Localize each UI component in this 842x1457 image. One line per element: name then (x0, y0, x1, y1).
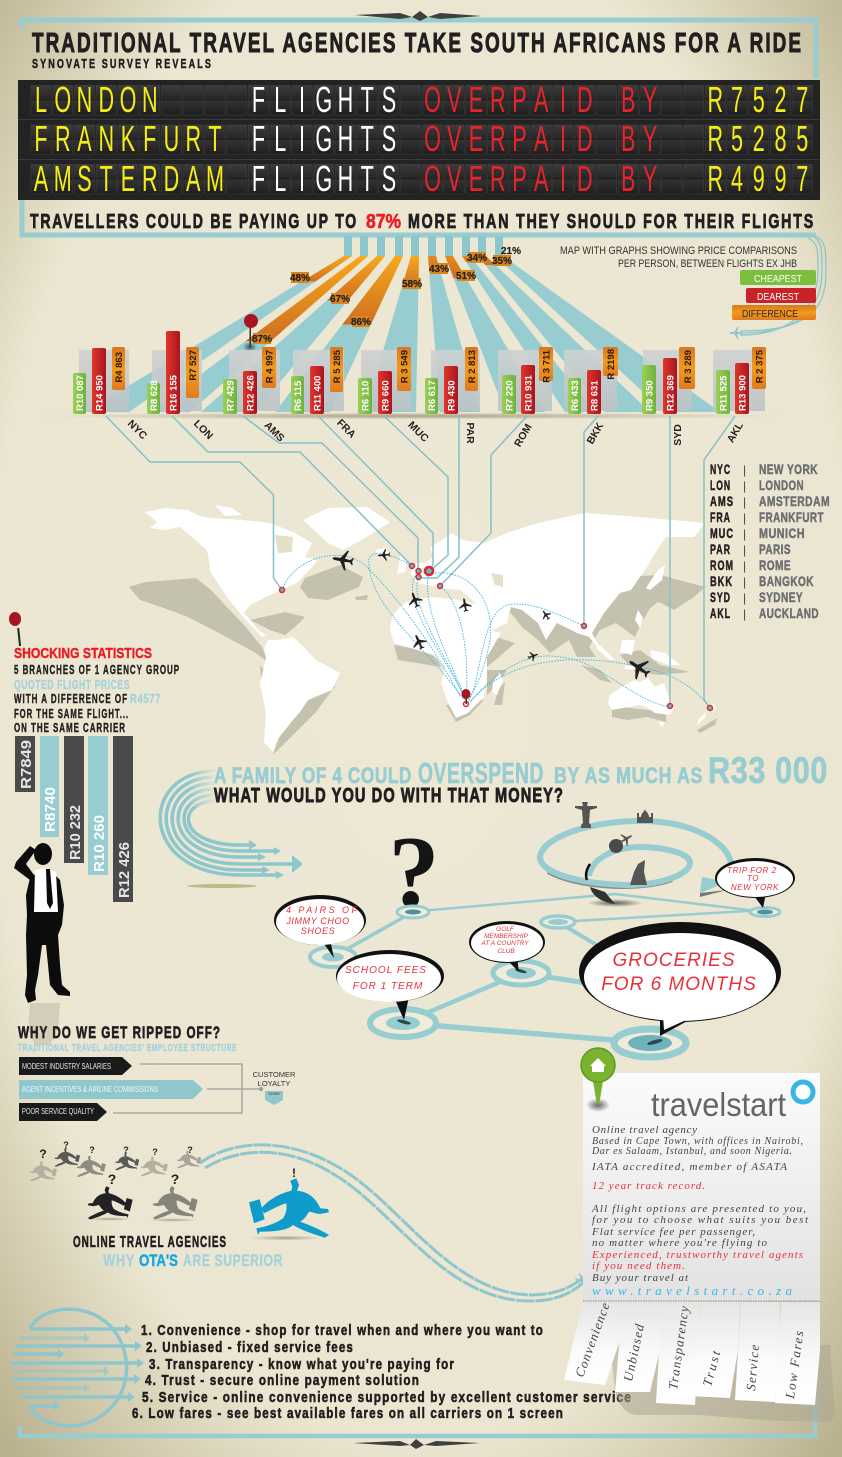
spiral of destinations (540, 802, 732, 907)
city key: | (743, 479, 746, 493)
OTA subheading: WHY (103, 1251, 135, 1270)
chart: LON (147, 331, 215, 442)
shocking statistics text: ON THE SAME CARRIER (14, 721, 126, 735)
board row: Frankfurt: FLIGHTS (252, 119, 396, 159)
subtitle: SYNOVATE SURVEY REVEALS (32, 56, 213, 71)
card text: www.travelstart.co.za (592, 1283, 792, 1298)
employee structure arrows: POOR SERVICE QUALITY (22, 1107, 94, 1116)
benefits list: 4. Trust - secure online payment solution (145, 1372, 420, 1389)
chart: MUC: MUC (405, 419, 431, 445)
card text: Experienced, trustworthy travel agents (591, 1249, 803, 1261)
chart: AMS (223, 347, 287, 444)
chart: FRA: R11 400 (312, 376, 324, 411)
chart: AKL: R 2 375 (754, 349, 766, 383)
city key: MUNICH (759, 525, 805, 541)
chart: LON: R16 155 (168, 374, 180, 411)
chart: SYD: R9 350 (644, 380, 656, 411)
shocking statistics text: WITH A DIFFERENCE OF (14, 692, 128, 706)
city key: SYDNEY (759, 589, 803, 605)
leader lines (106, 416, 735, 708)
map caption: PER PERSON, BETWEEN FLIGHTS EX JHB (618, 258, 797, 270)
chart: NYC: R4 863 (114, 352, 125, 383)
lower header frame (22, 200, 816, 235)
city key: LON (710, 477, 731, 493)
chart: ROM: R 3 711 (542, 349, 552, 383)
bubble: trip to New York: TO (747, 874, 759, 883)
OTA subheading (103, 1251, 283, 1270)
chart: MUC: R9 660 (380, 380, 392, 411)
logo: travelstart (651, 1086, 786, 1123)
benefits list: 3. Transparency - know what you're paying for (149, 1356, 455, 1373)
grey runners: ? (187, 1145, 193, 1155)
city key: BKK (710, 573, 733, 589)
bubble: Jimmy Choo: SHOES (301, 926, 335, 936)
shocking statistics text: SHOCKING STATISTICS (14, 645, 152, 662)
chart: FRA: FRA (334, 417, 358, 441)
chart: BKK (564, 347, 618, 446)
bottom ornament (353, 1439, 480, 1449)
city key: PAR (710, 541, 731, 557)
inland seas (275, 535, 503, 587)
bubble: Jimmy Choo: 4 PAIRS OF (286, 905, 358, 915)
board row: London (35, 80, 808, 120)
card text: All flight options are presented to you, (591, 1203, 806, 1215)
chart: AKL: R13 900 (738, 375, 748, 411)
chart: BKK: BKK (585, 420, 606, 446)
chart: AMS: AMS (262, 419, 287, 444)
chart: MUC: R6 110 (360, 381, 372, 411)
city key: PARIS (759, 541, 791, 557)
grey runner (149, 1171, 198, 1222)
chart: BKK: R6 433 (570, 380, 581, 411)
man silhouette (14, 843, 70, 1045)
connectors (113, 1064, 262, 1113)
departure board (18, 80, 820, 200)
customer loyalty: DOWN (268, 1092, 280, 1096)
tab: Transparency: Transparency (665, 1305, 692, 1390)
board row: London: R7527 (707, 80, 808, 120)
grey runners: ? (63, 1140, 69, 1150)
chart: ROM (498, 347, 553, 449)
price bars (15, 736, 133, 902)
board row: London: BY (621, 80, 657, 120)
top frame (22, 20, 816, 78)
employee structure arrows (19, 1057, 203, 1121)
family subheading: WHAT WOULD YOU DO WITH THAT MONEY? (214, 785, 564, 807)
city key: AUCKLAND (759, 605, 819, 621)
flight routes (282, 554, 710, 708)
travelstart card (583, 1073, 820, 1301)
card text: for you to choose what suits you best (592, 1214, 809, 1226)
chart: BKK: R8 631 (590, 380, 600, 411)
customer loyalty (253, 1070, 296, 1105)
pin: shocking statistics (9, 612, 21, 646)
blue runner (249, 1166, 329, 1240)
chart: FRA (291, 347, 358, 441)
card text (591, 1124, 809, 1298)
percentage labels: 43% (429, 264, 449, 275)
card text: Dar es Salaam, Istanbul, and soon Nigeria. (591, 1146, 792, 1157)
bubble: school fees: SCHOOL FEES (345, 965, 427, 976)
bubble: golf (469, 921, 545, 972)
bubble: groceries: FOR 6 MONTHS (601, 974, 757, 995)
city key: SYD (710, 589, 731, 605)
bubble: golf: MEMBERSHIP (484, 933, 529, 940)
arrow fade overlay (188, 765, 218, 807)
card text: if you need them. (592, 1260, 685, 1272)
OTA subheading: ARE SUPERIOR (183, 1251, 283, 1270)
city key: AKL (710, 605, 731, 621)
planes (330, 548, 655, 683)
arrow heads (187, 840, 303, 888)
chart: FRA: R6 115 (293, 380, 304, 411)
family heading (214, 750, 828, 791)
employee structure arrows: AGENT INCENTIVES & AIRLINE COMMISSIONS (22, 1085, 158, 1094)
map caption: MAP WITH GRAPHS SHOWING PRICE COMPARISONS (560, 245, 797, 257)
chart: AKL: AKL (725, 420, 746, 445)
chart: NYC: R14 950 (94, 375, 106, 411)
price bars: R8740 (42, 787, 59, 832)
card text: no matter where you're flying to (592, 1237, 768, 1249)
city key: LONDON (759, 477, 804, 493)
top ornament (355, 11, 482, 21)
world map shadow (129, 565, 717, 755)
headline: 87%: TRAVELLERS COULD BE PAYING UP TO (30, 211, 358, 233)
board row: Frankfurt: OVERPAID (424, 119, 593, 159)
percentage labels: 87% (252, 334, 272, 345)
chart: BKK: R 2198 (606, 349, 617, 380)
tab: Trust (689, 1302, 740, 1398)
bubble: trip to New York (715, 858, 795, 908)
city key: NEW YORK (759, 461, 818, 477)
chart: ROM: ROM (512, 422, 535, 449)
chart: NYC: NYC (125, 418, 149, 442)
chart: PAR: R9 430 (446, 380, 458, 411)
chart: SYD: SYD (672, 424, 684, 446)
chart: AKL (713, 347, 766, 445)
board row: London: LONDON (35, 80, 158, 120)
price bars: R10 260 (91, 815, 108, 872)
board row: London: FLIGHTS (252, 80, 396, 120)
grey runners: ? (89, 1145, 95, 1155)
city key: | (743, 607, 746, 621)
bubble: golf: GOLF (496, 926, 515, 933)
board row: Frankfurt (34, 119, 808, 159)
question mark: ? (388, 816, 440, 929)
chart: FRA: R 5 285 (332, 349, 343, 383)
logo ring (793, 1082, 813, 1102)
chart: AKL: R11 525 (718, 375, 730, 411)
chart: LON: LON (191, 418, 215, 442)
city key: | (743, 463, 746, 477)
tab: Convenience (564, 1300, 622, 1385)
shocking statistics text: 5 BRANCHES OF 1 AGENCY GROUP (14, 663, 180, 677)
world map (145, 505, 716, 752)
city key: | (743, 543, 746, 557)
family heading: BY AS MUCH AS (554, 763, 703, 788)
price bars: R10 232 (67, 805, 84, 860)
chart: LON: R8 628 (149, 380, 160, 411)
icon: Burj tower (630, 860, 647, 885)
bottom frame (20, 1395, 815, 1436)
airport markers (280, 564, 712, 710)
family heading: A FAMILY OF 4 COULD (214, 763, 412, 788)
OTA subheading: OTA'S (139, 1251, 178, 1270)
city key: FRA (710, 509, 731, 525)
card text: 12 year track record. (592, 1180, 705, 1192)
board row: Amsterdam (34, 159, 808, 199)
card text: Online travel agency (592, 1124, 697, 1136)
chart: PAR: R 2 813 (467, 350, 478, 383)
icon: Taj Mahal (637, 809, 653, 823)
percentage labels: 48% (290, 273, 310, 284)
bubble: school fees (336, 950, 444, 1020)
chart: MUC: R 3 549 (400, 350, 410, 383)
card text: Buy your travel at (592, 1272, 689, 1284)
tab: Low Fares: Low Fares (782, 1330, 806, 1400)
OTA heading: ONLINE TRAVEL AGENCIES (73, 1234, 227, 1251)
ground shadow under bars (37, 412, 787, 420)
card text: Based in Cape Town, with offices in Nairobi, (592, 1136, 803, 1147)
city key: | (743, 575, 746, 589)
card text: IATA accredited, member of ASATA (591, 1161, 787, 1173)
percentage labels: 34% (467, 253, 487, 264)
city key (710, 461, 830, 621)
arrow globe (11, 1309, 144, 1426)
chart: ROM: R10 931 (524, 374, 534, 411)
percentage labels: 51% (456, 271, 476, 282)
price bars: R7849 (18, 740, 35, 789)
percentage labels: 21% (501, 246, 521, 257)
city key: ROME (759, 557, 791, 573)
customer loyalty: LOYALTY (258, 1079, 290, 1088)
tab: Service: Service (743, 1344, 762, 1391)
bubble: groceries (579, 922, 781, 1036)
legend: DIFFERENCE (742, 308, 798, 320)
tear-off tabs (564, 1300, 820, 1405)
city key: | (743, 527, 746, 541)
tab: Convenience: Convenience (572, 1300, 613, 1379)
chart: NYC (73, 347, 149, 442)
map caption (560, 245, 797, 270)
tab: Trust: Trust (699, 1349, 723, 1388)
network of lines (333, 894, 765, 1043)
chart: PAR: PAR (464, 422, 476, 444)
swoosh with plane (729, 236, 826, 339)
benefits list: 6. Low fares - see best available fares on all carriers on 1 screen (132, 1405, 564, 1422)
tab: Low Fares (775, 1302, 820, 1405)
city key: MUC (710, 525, 734, 541)
shocking statistics text: QUOTED FLIGHT PRICES (14, 678, 130, 692)
family heading: OVERSPEND (418, 758, 544, 790)
legend (732, 270, 816, 320)
fan of price bands (85, 236, 720, 412)
city key: NYC (710, 461, 731, 477)
Johannesburg pin (462, 689, 470, 704)
shocking statistics text (14, 645, 180, 735)
shocking statistics text: R4577 (130, 692, 161, 706)
swoosh to travelstart (200, 1145, 583, 1301)
chart: LON: R7 527 (188, 350, 199, 381)
bubble: trip to New York: NEW YORK (731, 883, 779, 892)
chart: SYD: R 3 289 (683, 350, 694, 383)
tab: Unbiased: Unbiased (620, 1322, 647, 1383)
city key: | (743, 591, 746, 605)
headline: 87% (30, 211, 815, 233)
black runner (88, 1171, 133, 1221)
why section subheading: TRADITIONAL TRAVEL AGENCIES' EMPLOYEE STRUCTURE (18, 1042, 237, 1054)
icon: Christ statue (575, 802, 597, 828)
black runner: ? (108, 1171, 116, 1187)
board row: Amsterdam: OVERPAID (424, 159, 593, 199)
legend: CHEAPEST (754, 273, 802, 285)
benefits list: 2. Unbiased - fixed service fees (146, 1339, 354, 1356)
tab: Service (735, 1302, 780, 1402)
headline: 87%: 87% (366, 211, 401, 233)
bubble: Jimmy Choo: JIMMY CHOO (285, 916, 350, 926)
chart: AMS: R 4 997 (264, 350, 276, 383)
percentage labels: 58% (402, 279, 422, 290)
green home pin (581, 1048, 615, 1112)
city key: | (743, 495, 746, 509)
board row: Frankfurt: FRANKFURT (34, 119, 222, 159)
benefits list: 5. Service - online convenience supported by excellent customer service (142, 1389, 632, 1406)
blue runner: ! (292, 1166, 296, 1180)
chart: ROM: R7 220 (504, 380, 516, 411)
chart: MUC (358, 347, 431, 445)
bubble: trip to New York: TRIP FOR 2 (727, 866, 777, 875)
why section heading: WHY DO WE GET RIPPED OFF? (18, 1023, 221, 1042)
grey runners: ? (123, 1145, 129, 1155)
employee structure arrows: MODEST INDUSTRY SALARIES (22, 1062, 111, 1071)
curved arrows (160, 771, 296, 875)
grey runners: ? (152, 1147, 158, 1157)
chart: AMS: R7 429 (226, 380, 236, 411)
plane at swoosh end (574, 1272, 590, 1286)
city key: AMS (710, 493, 734, 509)
tab: Transparency (656, 1302, 700, 1405)
grey runner: ? (171, 1171, 179, 1187)
bubble: groceries: GROCERIES (612, 950, 736, 971)
bubble: golf: AT A COUNTRY (480, 940, 529, 947)
bubble: golf: CLUB (497, 948, 515, 955)
board row: Amsterdam: AMSTERDAM (34, 159, 224, 199)
grey runners (30, 1140, 201, 1181)
customer loyalty: CUSTOMER (253, 1070, 296, 1079)
benefits list (132, 1322, 632, 1422)
percentage labels (252, 246, 521, 345)
chart: AMS: R12 426 (246, 375, 256, 411)
board row: Frankfurt: R5285 (707, 119, 808, 159)
city key: BANGKOK (759, 573, 814, 589)
percentage labels: 67% (330, 294, 350, 305)
board row: London: OVERPAID (424, 80, 593, 120)
city key: | (743, 559, 746, 573)
board row: Amsterdam: FLIGHTS (252, 159, 396, 199)
chart: PAR (425, 347, 480, 444)
chart: SYD: R12 369 (666, 375, 676, 411)
chart: NYC: R10 087 (75, 375, 86, 411)
tab shadows (610, 1345, 835, 1423)
percentage labels: 86% (351, 317, 371, 328)
percentage labels: 35% (492, 256, 512, 267)
city key: ROM (710, 557, 734, 573)
benefits list: 1. Convenience - shop for travel when and where you want to (141, 1322, 544, 1339)
legend: DEAREST (757, 291, 799, 303)
board row: Amsterdam: R4997 (707, 159, 808, 199)
icon: globe and plane (609, 830, 635, 853)
grey runners: ? (39, 1147, 47, 1161)
pin on chart (243, 314, 258, 352)
bubble: Jimmy Choo (274, 895, 366, 958)
board row: Frankfurt: BY (621, 119, 657, 159)
shocking statistics text: FOR THE SAME FLIGHT... (14, 707, 129, 721)
chart: SYD (642, 347, 695, 446)
bubble: school fees: FOR 1 TERM (353, 981, 423, 992)
chart: PAR: R6 617 (427, 380, 438, 411)
price bars: R12 426 (116, 842, 133, 898)
city key: | (743, 511, 746, 525)
card text: Flat service fee per passenger, (591, 1226, 755, 1238)
tab: Unbiased (615, 1302, 661, 1392)
network nodes (310, 906, 780, 1057)
board row: Amsterdam: BY (621, 159, 657, 199)
